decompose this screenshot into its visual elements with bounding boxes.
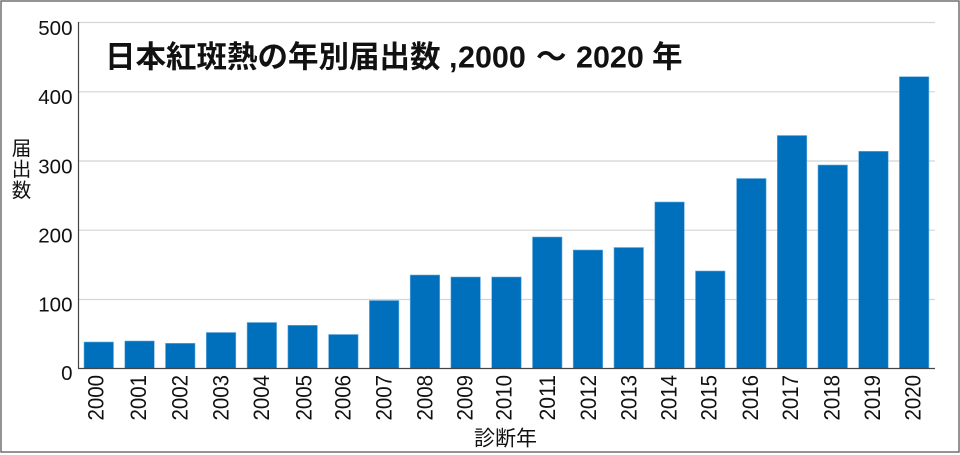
x axis year labels: 2019 bbox=[860, 375, 885, 420]
x axis year labels: 2018 bbox=[819, 375, 844, 420]
x axis year labels: 2006 bbox=[331, 375, 356, 420]
y axis title bbox=[12, 138, 31, 202]
chart title: 日本紅斑熱の年別届出数 bbox=[105, 40, 440, 74]
x axis year labels: 2008 bbox=[412, 375, 437, 420]
chart title: 2000 bbox=[458, 40, 526, 74]
x axis year labels: 2000 bbox=[83, 375, 108, 420]
x axis year labels: 2001 bbox=[126, 375, 151, 420]
x axis year labels: 2014 bbox=[657, 375, 682, 420]
x axis year labels: 2004 bbox=[249, 375, 274, 420]
x axis year labels: 2010 bbox=[492, 375, 517, 420]
x axis year labels: 2011 bbox=[535, 375, 560, 420]
chart title: , bbox=[449, 40, 457, 74]
y axis tick labels: 300 bbox=[38, 155, 72, 178]
chart title: ～ bbox=[536, 40, 566, 74]
y axis title: 数 bbox=[12, 180, 31, 202]
x axis year labels: 2005 bbox=[292, 375, 317, 420]
y axis title: 届 bbox=[12, 138, 31, 160]
x axis year labels: 2015 bbox=[697, 375, 722, 420]
x axis year labels: 2020 bbox=[901, 375, 926, 420]
chart title: 年 bbox=[652, 40, 682, 74]
y axis tick labels: 0 bbox=[61, 362, 72, 385]
y axis tick labels: 400 bbox=[38, 86, 72, 109]
x axis year labels bbox=[83, 375, 926, 420]
x axis year labels: 2013 bbox=[617, 375, 642, 420]
axes bbox=[78, 22, 935, 368]
x axis year labels: 2016 bbox=[738, 375, 763, 420]
x axis year labels: 2009 bbox=[453, 375, 478, 420]
y axis tick labels: 200 bbox=[38, 224, 72, 248]
x axis year labels: 2003 bbox=[208, 375, 233, 420]
x axis year labels: 2007 bbox=[372, 375, 397, 420]
y axis tick labels: 100 bbox=[38, 294, 72, 317]
bars bbox=[84, 77, 929, 368]
y axis tick labels: 500 bbox=[38, 17, 72, 40]
x axis year labels: 2017 bbox=[778, 375, 803, 420]
x axis year labels: 2012 bbox=[576, 375, 601, 420]
y axis title: 出 bbox=[12, 159, 31, 181]
x axis year labels: 2002 bbox=[168, 375, 193, 420]
x axis title: 診断年 bbox=[474, 428, 537, 450]
y axis tick labels bbox=[38, 17, 72, 385]
chart title: 2020 bbox=[576, 40, 644, 74]
